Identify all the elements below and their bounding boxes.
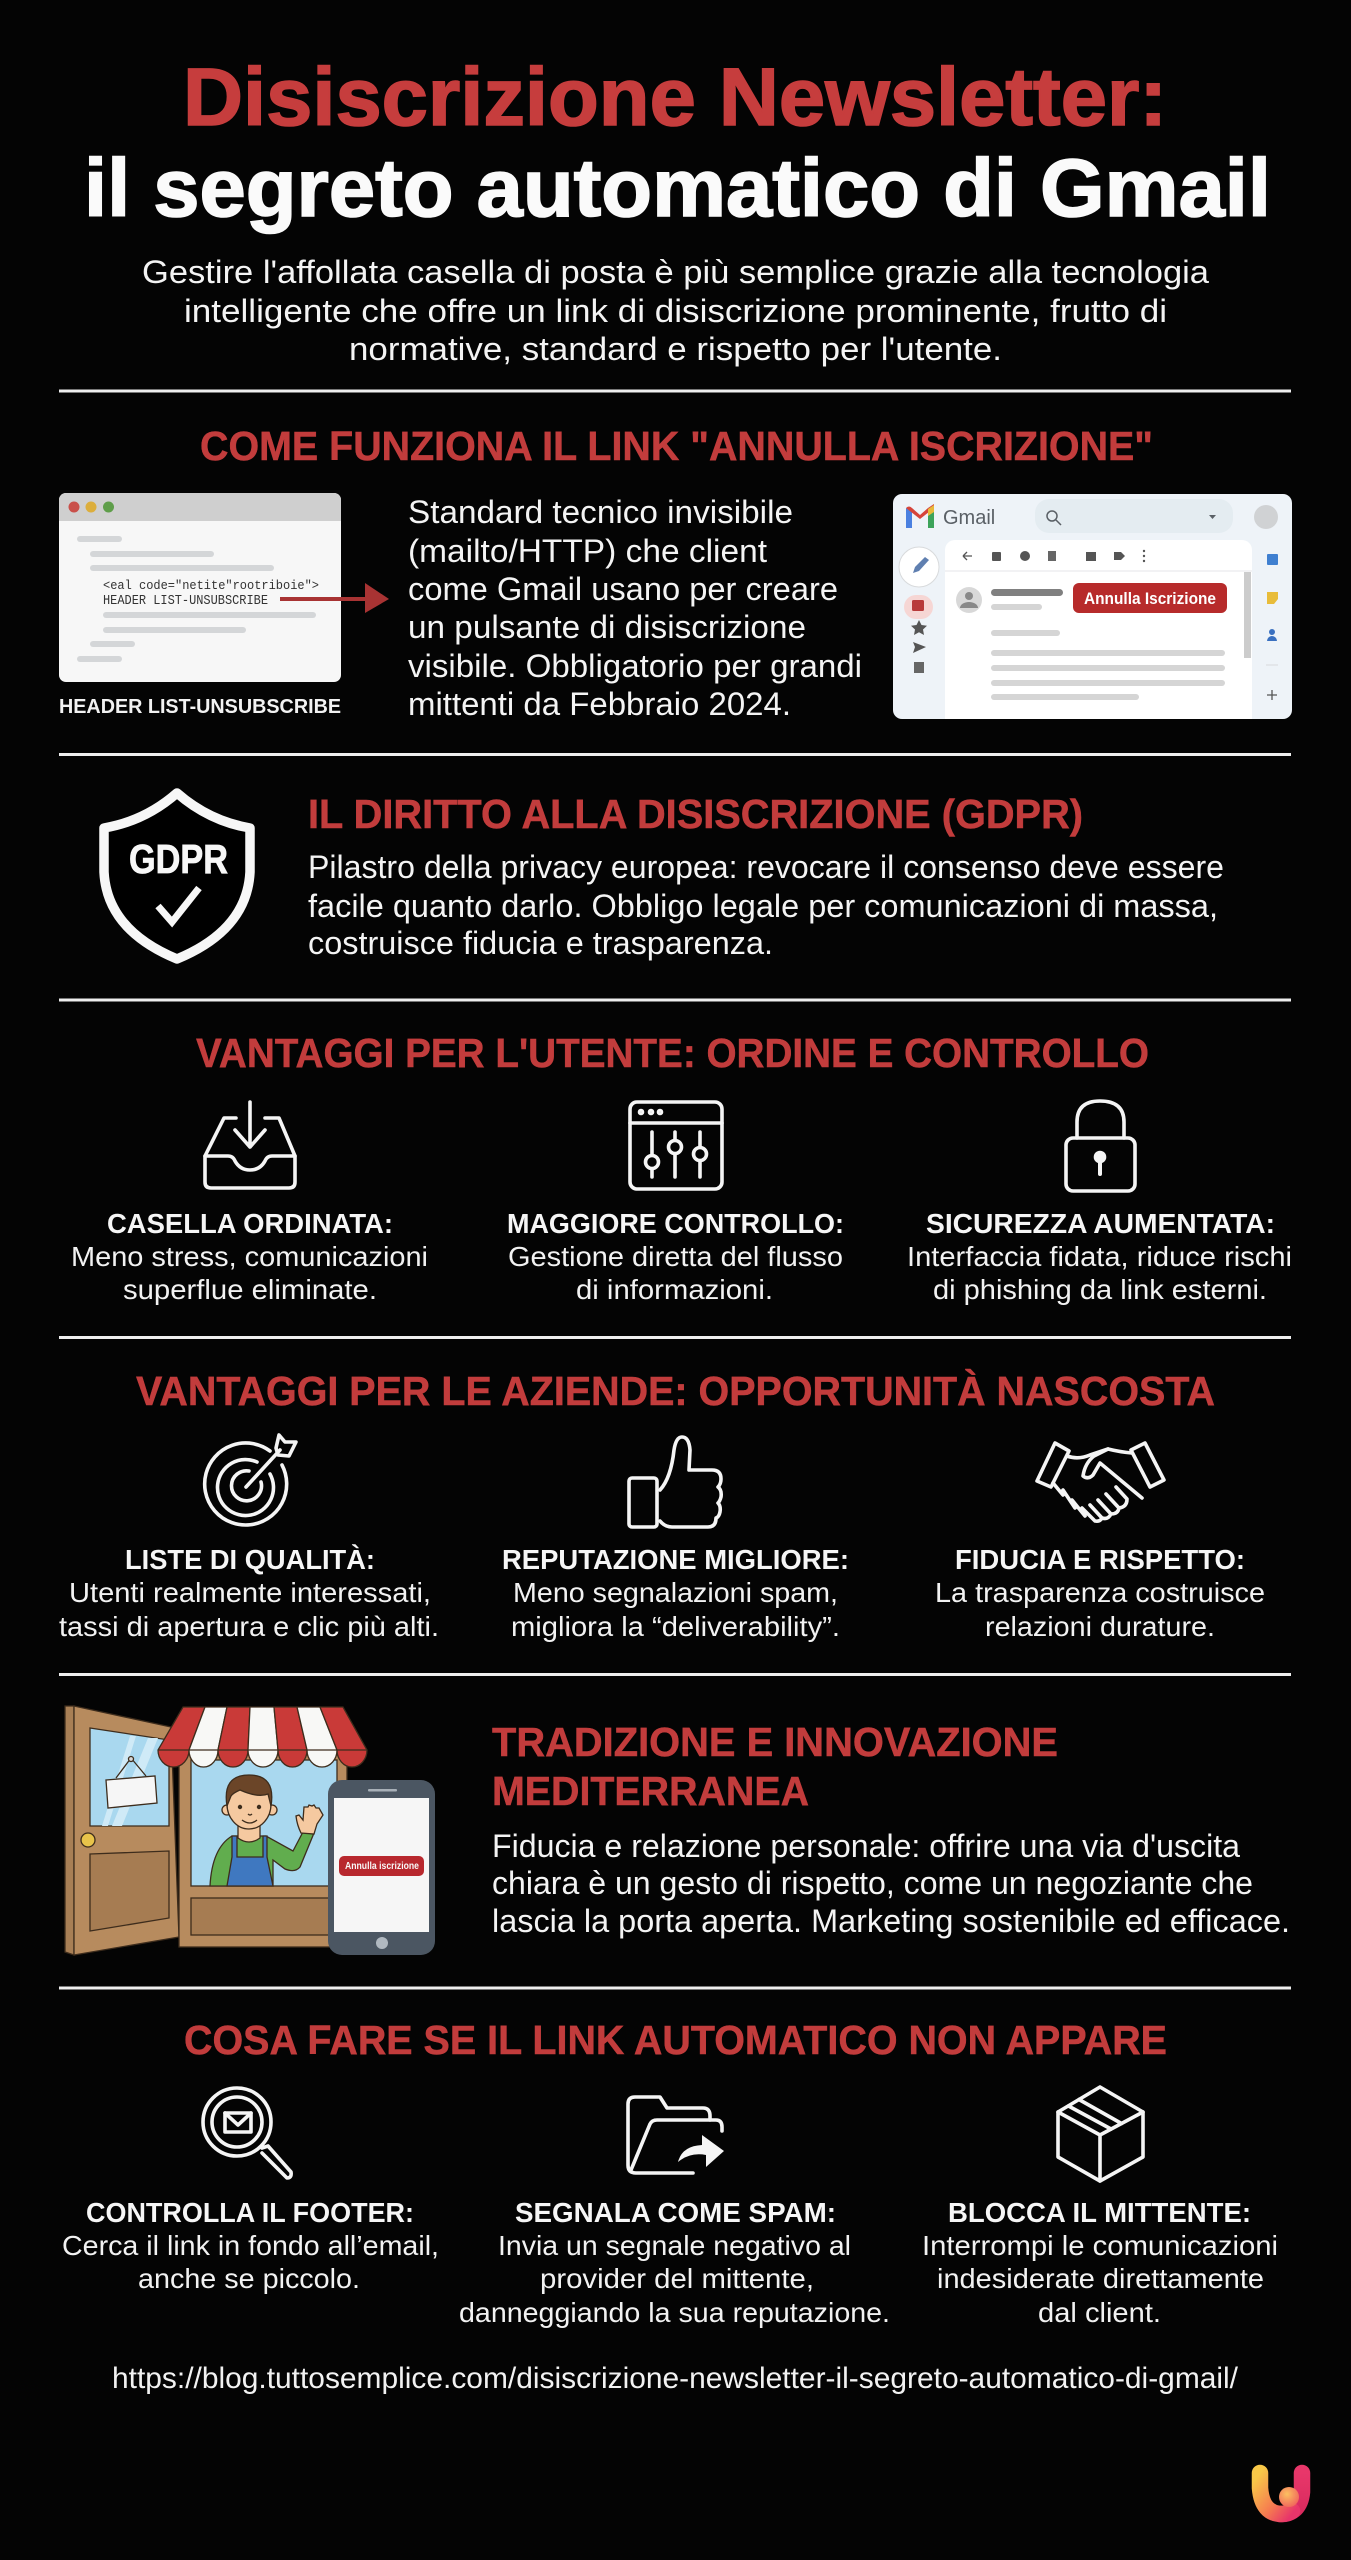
column: casella ordinata: superflue eliminate.	[123, 1274, 377, 1305]
shop front	[179, 1755, 347, 1947]
panel: gdpr	[104, 791, 1224, 961]
gmail mockup: Gmail	[943, 507, 995, 529]
column: liste di qualita: Utenti realmente interessati,	[69, 1577, 431, 1608]
icon: inbox	[205, 1102, 295, 1188]
door	[65, 1706, 179, 1955]
tradizione text: chiara è un gesto di rispetto, come un negoziante che	[492, 1865, 1253, 1901]
column: blocca il mittente: Interrompi le comunicazioni	[922, 2230, 1278, 2261]
icon: gdpr shield: GDPR	[129, 836, 228, 882]
icon: target	[205, 1435, 296, 1525]
panel: vantaggi aziende	[59, 1368, 1265, 1642]
logo	[1260, 2473, 1302, 2514]
column: blocca il mittente: BLOCCA IL MITTENTE:	[948, 2197, 1251, 2228]
column: reputazione migliore: Meno segnalazioni spam,	[513, 1577, 838, 1608]
column: fiducia e rispetto: relazioni durature.	[985, 1611, 1215, 1642]
intro text: intelligente che offre un link di disiscrizione prominente, frutto di	[184, 293, 1167, 329]
title: il segreto automatico di Gmail	[84, 143, 1271, 234]
column: sicurezza aumentata: SICUREZZA AUMENTATA:	[926, 1208, 1275, 1239]
gdpr text	[308, 849, 1224, 961]
heading: tradizione	[492, 1719, 1058, 1814]
column: reputazione migliore: migliora la “deliverability”.	[511, 1611, 840, 1642]
column: sicurezza aumentata	[907, 1208, 1292, 1305]
description text: mittenti da Febbraio 2024.	[408, 686, 791, 722]
icon: handshake	[1037, 1443, 1164, 1521]
title	[84, 52, 1271, 234]
column: liste di qualita: LISTE DI QUALITÀ:	[125, 1544, 375, 1575]
intro text: normative, standard e rispetto per l'utente.	[349, 331, 1002, 367]
column: controlla il footer: Cerca il link in fondo all’email,	[62, 2230, 439, 2261]
description text: visibile. Obbligatorio per grandi	[408, 648, 862, 684]
column: maggiore controllo: di informazioni.	[576, 1274, 773, 1305]
description text: Standard tecnico invisibile	[408, 494, 793, 530]
column: fiducia e rispetto: FIDUCIA E RISPETTO:	[955, 1544, 1245, 1575]
column: sicurezza aumentata: Interfaccia fidata, riduce rischi	[907, 1241, 1292, 1272]
column: liste di qualita: tassi di apertura e clic più alti.	[59, 1611, 439, 1642]
awning	[158, 1707, 367, 1767]
gmail mockup	[893, 494, 1292, 719]
gdpr text: Pilastro della privacy europea: revocare il consenso deve essere	[308, 849, 1224, 885]
browser window illustration: <eal code="netite"rootriboie">	[103, 578, 319, 593]
shopkeeper	[210, 1775, 323, 1886]
icon: magnifier with envelope	[203, 2088, 291, 2178]
heading: vantaggi utente: VANTAGGI PER L'UTENTE: ORDINE E CONTROLLO	[196, 1030, 1149, 1076]
source url: https://blog.tuttosemplice.com/disiscrizione-newsletter-il-segreto-automatico-di-gmail/	[112, 2362, 1239, 2395]
tradizione text: lascia la porta aperta. Marketing sostenibile ed efficace.	[492, 1903, 1290, 1939]
column: maggiore controllo: Gestione diretta del flusso	[508, 1241, 843, 1272]
icon: gdpr shield	[104, 793, 250, 959]
column: segnala come spam: provider del mittente,	[540, 2263, 814, 2294]
gdpr text: facile quanto darlo. Obbligo legale per comunicazioni di massa,	[308, 888, 1218, 924]
column: maggiore controllo	[507, 1208, 844, 1305]
panel: tradizione e innovazione	[65, 1706, 1290, 1955]
heading: vantaggi aziende: VANTAGGI PER LE AZIENDE: OPPORTUNITÀ NASCOSTA	[136, 1368, 1215, 1414]
phone: Annulla iscrizione	[345, 1861, 419, 1872]
tradizione text: Fiducia e relazione personale: offrire una via d'uscita	[492, 1828, 1240, 1864]
panel: cosa fare	[62, 2017, 1278, 2328]
phone	[328, 1780, 435, 1955]
panel: vantaggi utente	[71, 1030, 1292, 1305]
column: segnala come spam: Invia un segnale negativo al	[498, 2230, 851, 2261]
column: segnala come spam: SEGNALA COME SPAM:	[515, 2197, 836, 2228]
column: reputazione migliore	[502, 1544, 849, 1642]
icon: lock	[1066, 1101, 1135, 1191]
icon: box	[1058, 2087, 1143, 2181]
column: fiducia e rispetto	[935, 1544, 1265, 1642]
column: liste di qualita	[59, 1544, 439, 1642]
panel: come funziona	[59, 423, 1292, 722]
column: controlla il footer	[62, 2197, 439, 2294]
column: reputazione migliore: REPUTAZIONE MIGLIORE:	[502, 1544, 849, 1575]
column: fiducia e rispetto: La trasparenza costruisce	[935, 1577, 1265, 1608]
browser window illustration: HEADER LIST-UNSUBSCRIBE	[103, 593, 268, 609]
heading: tradizione: TRADIZIONE E INNOVAZIONE	[492, 1719, 1058, 1765]
column: blocca il mittente: dal client.	[1038, 2297, 1161, 2328]
arrow	[280, 583, 389, 613]
description text: come Gmail usano per creare	[408, 571, 838, 607]
title: Disiscrizione Newsletter:	[183, 52, 1167, 143]
column: segnala come spam: danneggiando la sua reputazione.	[459, 2297, 890, 2328]
column: casella ordinata	[71, 1208, 428, 1305]
browser window illustration	[59, 493, 341, 682]
description text: un pulsante di disiscrizione	[408, 609, 806, 645]
label: header list-unsubscribe: HEADER LIST-UNSUBSCRIBE	[59, 696, 341, 718]
column: maggiore controllo: MAGGIORE CONTROLLO:	[507, 1208, 844, 1239]
column: segnala come spam	[459, 2197, 890, 2328]
column: controlla il footer: anche se piccolo.	[138, 2263, 360, 2294]
column: blocca il mittente: indesiderate direttamente	[937, 2263, 1264, 2294]
button: annulla iscrizione	[1073, 583, 1227, 613]
heading: cosa fare: COSA FARE SE IL LINK AUTOMATICO NON APPARE	[184, 2017, 1167, 2063]
gdpr text: costruisce fiducia e trasparenza.	[308, 925, 773, 961]
icon: folder with arrow	[628, 2097, 724, 2173]
column: casella ordinata: CASELLA ORDINATA:	[107, 1208, 393, 1239]
heading: tradizione: MEDITERRANEA	[492, 1768, 809, 1814]
intro text	[142, 254, 1209, 367]
description text	[408, 494, 862, 722]
description text: (mailto/HTTP) che client	[408, 533, 767, 569]
column: controlla il footer: CONTROLLA IL FOOTER:	[86, 2197, 414, 2228]
column: blocca il mittente	[922, 2197, 1278, 2328]
tradizione text	[492, 1828, 1290, 1939]
intro text: Gestire l'affollata casella di posta è più semplice grazie alla tecnologia	[142, 254, 1209, 290]
button: annulla iscrizione: Annulla Iscrizione	[1084, 589, 1216, 608]
icon: thumbs up	[629, 1437, 721, 1527]
column: sicurezza aumentata: di phishing da link esterni.	[933, 1274, 1267, 1305]
icon: sliders	[630, 1102, 722, 1189]
column: casella ordinata: Meno stress, comunicazioni	[71, 1241, 428, 1272]
heading: gdpr: IL DIRITTO ALLA DISISCRIZIONE (GDPR)	[308, 791, 1083, 837]
heading: come funziona: COME FUNZIONA IL LINK "ANNULLA ISCRIZIONE"	[200, 423, 1153, 469]
illustration: shop and phone	[65, 1706, 435, 1955]
